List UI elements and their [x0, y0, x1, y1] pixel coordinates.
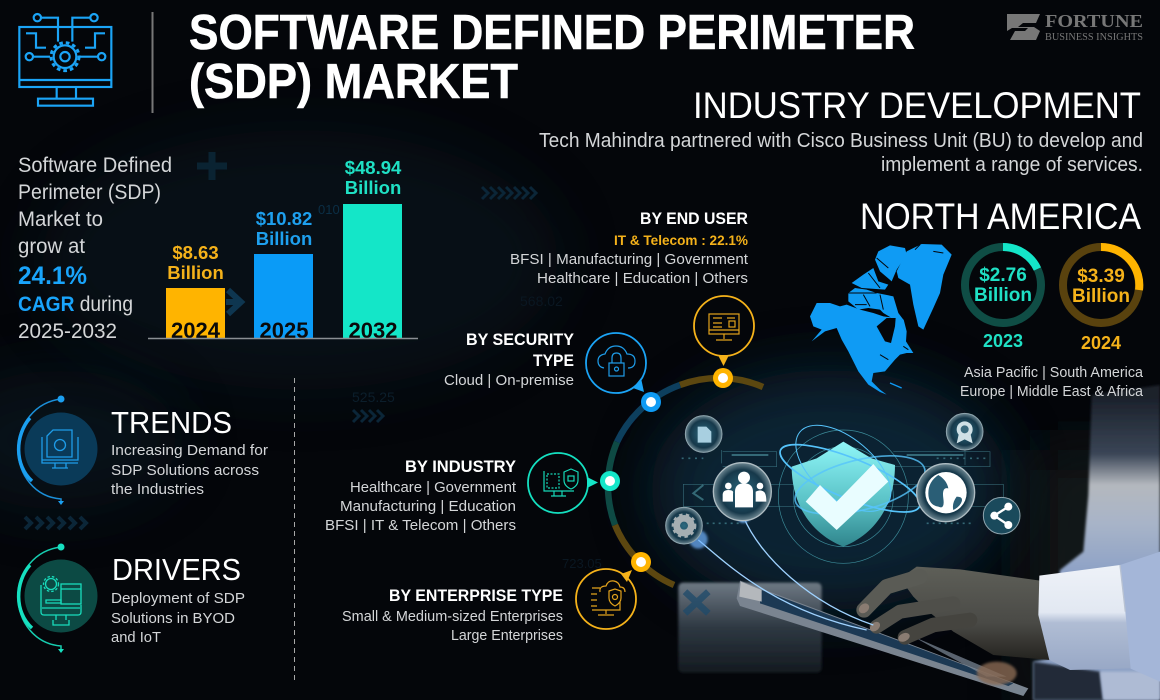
segment: by security type: TYPE	[533, 352, 574, 370]
donut 2023	[965, 247, 1041, 351]
other regions: Asia Pacific | South America	[964, 365, 1144, 381]
bubble: award	[946, 413, 983, 450]
blurred background rectangle	[678, 583, 822, 673]
drivers panel: and IoT	[111, 629, 161, 646]
north america heading: NORTH AMERICA	[860, 196, 1141, 237]
bar 2024: Billion	[167, 262, 224, 283]
other regions: Europe | Middle East & Africa	[960, 384, 1144, 400]
donut 2023: Billion	[974, 285, 1032, 306]
title: (SDP) MARKET	[189, 55, 518, 109]
market growth text: Software Defined	[18, 154, 172, 177]
vertical dashed divider	[294, 378, 296, 682]
drivers panel: Solutions in BYOD	[111, 610, 235, 627]
industry development: Tech Mahindra partnered with Cisco Business Unit (BU) to develop and	[539, 130, 1143, 152]
bubble: gear	[666, 507, 702, 544]
drivers panel	[18, 544, 245, 653]
trends panel: Increasing Demand for	[111, 442, 268, 459]
bubble: document	[685, 416, 722, 452]
trends panel: the Industries	[111, 481, 204, 498]
background: 723.05	[562, 556, 602, 571]
segment: by security type: BY SECURITY	[466, 331, 574, 349]
map: North America	[810, 244, 952, 395]
photo: shirt cuff	[1038, 552, 1160, 682]
bar 2032	[343, 157, 402, 343]
drivers panel: DRIVERS	[112, 552, 241, 587]
market growth text: 24.1%	[18, 262, 87, 290]
bubble: share	[983, 497, 1020, 534]
market growth text: CAGR during	[18, 293, 133, 316]
trends panel: TRENDS	[111, 405, 232, 440]
segment: by enterprise type	[342, 587, 563, 644]
segment: by security type: Cloud | On-premise	[444, 373, 574, 389]
industry development	[539, 85, 1143, 176]
segment: by industry: Healthcare | Government	[350, 480, 516, 496]
other regions	[960, 365, 1144, 400]
bar 2025	[254, 208, 313, 343]
segment: by end user	[510, 210, 748, 287]
background: 525.25	[352, 389, 395, 405]
market growth text: Market to	[18, 208, 103, 231]
trends panel: SDP Solutions across	[111, 462, 259, 479]
segment: by security type	[444, 331, 574, 389]
title: SOFTWARE DEFINED PERIMETER	[189, 6, 915, 60]
industry development: INDUSTRY DEVELOPMENT	[693, 85, 1141, 126]
drivers panel: Deployment of SDP	[111, 590, 245, 607]
bar 2025: 2025	[260, 318, 308, 343]
bar chart	[148, 157, 418, 343]
segment: by industry: Manufacturing | Education	[340, 499, 516, 515]
segment: by industry: BFSI | IT & Telecom | Others	[325, 518, 516, 534]
donut 2023: 2023	[983, 331, 1023, 351]
market growth text: 2025-2032	[18, 320, 117, 343]
photo: shirt sleeve	[1033, 385, 1160, 700]
segment: by end user: IT & Telecom : 22.1%	[614, 233, 748, 248]
donut 2024: 2024	[1081, 333, 1121, 353]
segment: by end user: BFSI | Manufacturing | Government	[510, 252, 748, 268]
title	[189, 6, 915, 109]
icon: monitor with gear	[19, 14, 111, 106]
background: 010	[318, 202, 340, 217]
logo: Fortune Business Insights	[1007, 11, 1143, 43]
logo: Fortune Business Insights: BUSINESS INSIGHTS	[1045, 32, 1143, 43]
bar 2032: Billion	[345, 177, 401, 198]
node: enterprise type	[576, 552, 651, 629]
tablet	[737, 581, 1028, 696]
logo: Fortune Business Insights: FORTUNE	[1045, 11, 1143, 31]
segment: by end user: BY END USER	[640, 210, 748, 228]
segment: by industry: BY INDUSTRY	[405, 458, 516, 476]
photo: tablet, hand and security hologram	[666, 409, 1050, 696]
hand	[857, 567, 1050, 660]
bar 2025: $10.82	[256, 208, 312, 229]
header divider	[152, 12, 154, 113]
light beams	[698, 517, 873, 630]
segment: by enterprise type: Small & Medium-sized Enterprises	[342, 609, 563, 625]
trends panel	[18, 396, 268, 505]
donut 2024	[1063, 247, 1139, 353]
segment: by enterprise type: Large Enterprises	[451, 628, 563, 644]
bar 2032: 2032	[349, 318, 397, 343]
segment: by industry	[325, 458, 516, 534]
icon: drivers	[18, 544, 98, 653]
background: 568.02	[520, 293, 563, 309]
icon: trends	[18, 396, 98, 505]
bar 2032: $48.94	[345, 157, 402, 178]
market growth text: Perimeter (SDP)	[18, 181, 161, 204]
shield	[773, 409, 931, 563]
node: security type	[586, 333, 661, 412]
industry development: implement a range of services.	[881, 154, 1143, 176]
node: end user	[694, 296, 754, 388]
circuit lines	[682, 450, 1003, 523]
bar 2025: Billion	[256, 228, 312, 249]
bar 2024	[166, 242, 225, 343]
market growth text	[18, 154, 172, 343]
donut 2023: $2.76	[979, 265, 1027, 286]
segment: by end user: Healthcare | Education | Others	[537, 271, 748, 287]
segment: by enterprise type: BY ENTERPRISE TYPE	[389, 587, 563, 605]
node: industry	[528, 453, 620, 513]
donut 2024: $3.39	[1077, 266, 1125, 287]
market growth text: grow at	[18, 235, 85, 258]
segmented arc	[608, 378, 763, 585]
donut 2024: Billion	[1072, 286, 1130, 307]
bar 2024: 2024	[171, 318, 221, 343]
bubble: globe	[917, 464, 975, 522]
bar 2024: $8.63	[172, 242, 219, 263]
bubble: people	[713, 463, 771, 521]
